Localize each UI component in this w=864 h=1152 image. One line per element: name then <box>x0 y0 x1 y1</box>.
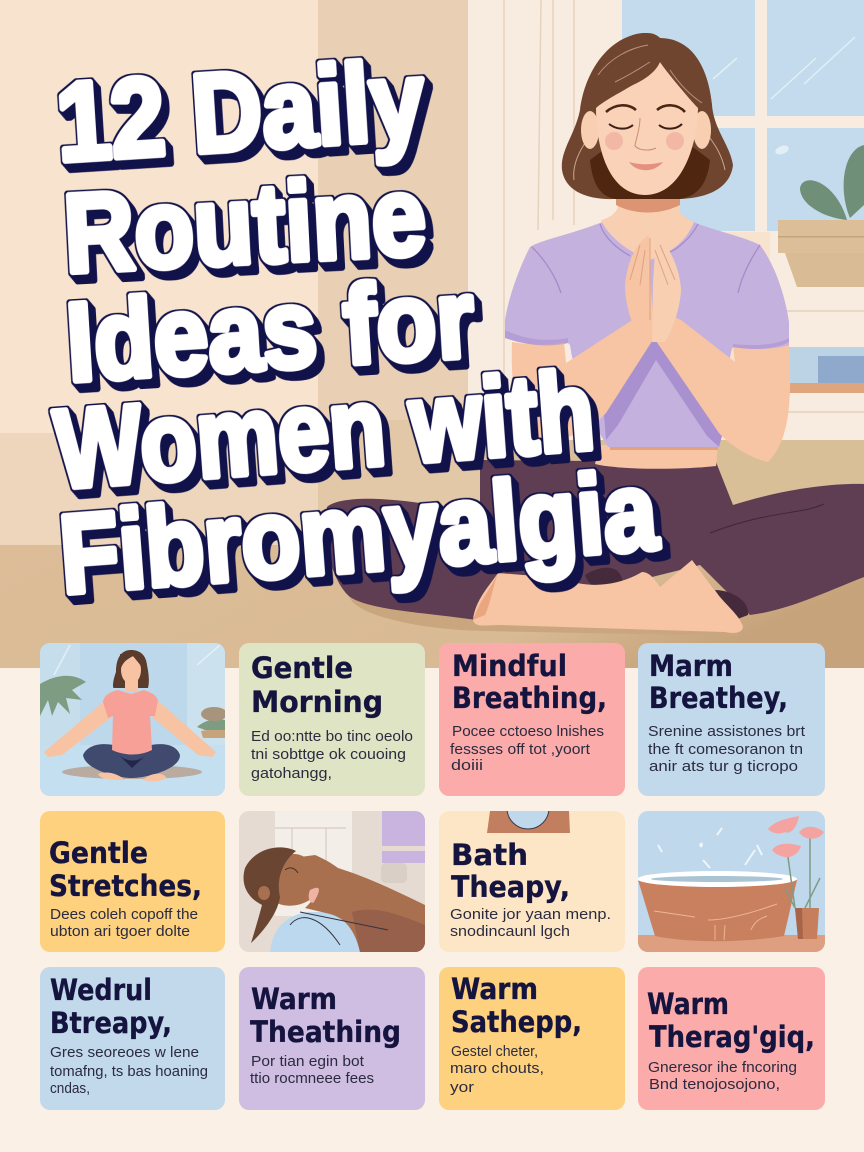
card 3: mindful breathing: doiii <box>451 758 483 774</box>
card 7: bath therapy: Bath <box>451 838 528 872</box>
card 9: wedrul btreapy: cndas, <box>50 1081 90 1097</box>
title: Fibromyalgia <box>56 448 662 617</box>
hands <box>625 235 655 340</box>
ears <box>581 111 599 149</box>
feet <box>473 560 743 633</box>
card 7: bath therapy: Gonite jor yaan menp. <box>450 907 611 923</box>
hair back <box>562 33 733 199</box>
card 7: bath therapy <box>439 811 625 952</box>
mouth <box>629 162 663 170</box>
card 11: warm sathepp: Gestel cheter, <box>451 1044 538 1060</box>
eyes and brows <box>606 105 685 112</box>
card 9: wedrul btreapy: Wedrul <box>50 973 152 1007</box>
page bottom background <box>0 668 864 1152</box>
plant on windowsill <box>778 145 864 287</box>
card 2: gentle morning: Ed oo:ntte bo tinc oeolo <box>251 729 413 745</box>
card 12: warm therag giq: Warm <box>647 987 729 1021</box>
window <box>622 0 864 232</box>
shirt fold triangle <box>604 338 722 447</box>
title: 12 Daily <box>53 38 428 185</box>
nose <box>635 118 656 150</box>
card 3: mindful breathing: fessses off tot ,yoort <box>450 742 590 758</box>
card 2: gentle morning: Gentle <box>251 651 353 685</box>
card 9: wedrul btreapy: tomafng, ts bas hoaning <box>50 1064 208 1080</box>
card 9: wedrul btreapy: Gres seoreoes w lene <box>50 1045 199 1061</box>
arms <box>512 315 654 440</box>
card 2: gentle morning <box>239 643 425 796</box>
card 11: warm sathepp: maro chouts, <box>450 1061 544 1077</box>
card 4: marm breathey: anir ats tur g ticropo <box>649 759 798 775</box>
routine card grid <box>40 643 825 1110</box>
card 4: marm breathey: the ft comesoranon tn <box>648 742 803 758</box>
card 11: warm sathepp: Sathepp, <box>451 1005 582 1039</box>
shirt <box>505 221 789 447</box>
card 11: warm sathepp: yor <box>450 1080 474 1096</box>
neck <box>601 190 694 260</box>
card 10: warm theathing: Por tian egin bot <box>251 1054 364 1070</box>
card 5: gentle stretches: Stretches, <box>49 869 202 903</box>
title: Routine <box>61 154 429 296</box>
card 6: woman resting illustration <box>239 811 425 952</box>
card 9: wedrul btreapy <box>40 967 225 1110</box>
card 3: mindful breathing: Mindful <box>452 649 567 683</box>
room background <box>0 0 864 668</box>
cheeks <box>605 132 623 150</box>
card 10: warm theathing <box>239 967 425 1110</box>
curtain <box>480 0 625 440</box>
card 12: warm therag giq: Gneresor ihe fncoring <box>648 1060 797 1076</box>
card 2: gentle morning: Morning <box>251 685 383 719</box>
card 5: gentle stretches: Gentle <box>49 836 148 870</box>
card 3: mindful breathing <box>439 643 625 796</box>
card 5: gentle stretches <box>40 811 225 952</box>
bangs <box>582 33 663 104</box>
card 2: gentle morning: gatohangg, <box>251 766 332 782</box>
card 9: wedrul btreapy: Btreapy, <box>50 1006 172 1040</box>
card 10: warm theathing: ttio rocmneee fees <box>250 1071 374 1087</box>
card 3: mindful breathing: Breathing, <box>452 681 607 715</box>
title: Ideas for <box>63 256 478 405</box>
woman meditating <box>325 33 864 636</box>
card 4: marm breathey: Marm <box>649 649 733 683</box>
card 7: bath therapy: snodincaunl lgch <box>450 924 570 940</box>
card 3: mindful breathing: Pocee cctoeso lnishes <box>452 724 604 740</box>
card 7: bath therapy: Theapy, <box>451 870 570 904</box>
card 11: warm sathepp: Warm <box>451 972 538 1006</box>
title: Women with <box>51 349 598 512</box>
card 5: gentle stretches: ubton ari tgoer dolte <box>50 924 190 940</box>
floor shadow <box>349 595 740 636</box>
card 5: gentle stretches: Dees coleh copoff the <box>50 907 198 923</box>
card 4: marm breathey: Srenine assistones brt <box>648 724 805 740</box>
bare midriff <box>595 445 718 469</box>
card 11: warm sathepp <box>439 967 625 1110</box>
card 2: gentle morning: tni sobttge ok couoing <box>251 747 406 763</box>
card 10: warm theathing: Theathing <box>250 1015 401 1049</box>
card 12: warm therag giq: Bnd tenojosojono, <box>649 1077 780 1093</box>
card 4: marm breathey: Breathey, <box>649 681 788 715</box>
face <box>596 62 698 195</box>
card 12: warm therag giq <box>638 967 825 1110</box>
card 1: seated woman illustration <box>40 643 227 796</box>
lower wall and shelf <box>770 232 864 440</box>
card 12: warm therag giq: Therag'giq, <box>649 1020 815 1054</box>
leggings <box>325 460 864 620</box>
card 4: marm breathey <box>638 643 825 796</box>
card 10: warm theathing: Warm <box>251 982 337 1016</box>
card 8: bathtub illustration <box>637 811 825 952</box>
